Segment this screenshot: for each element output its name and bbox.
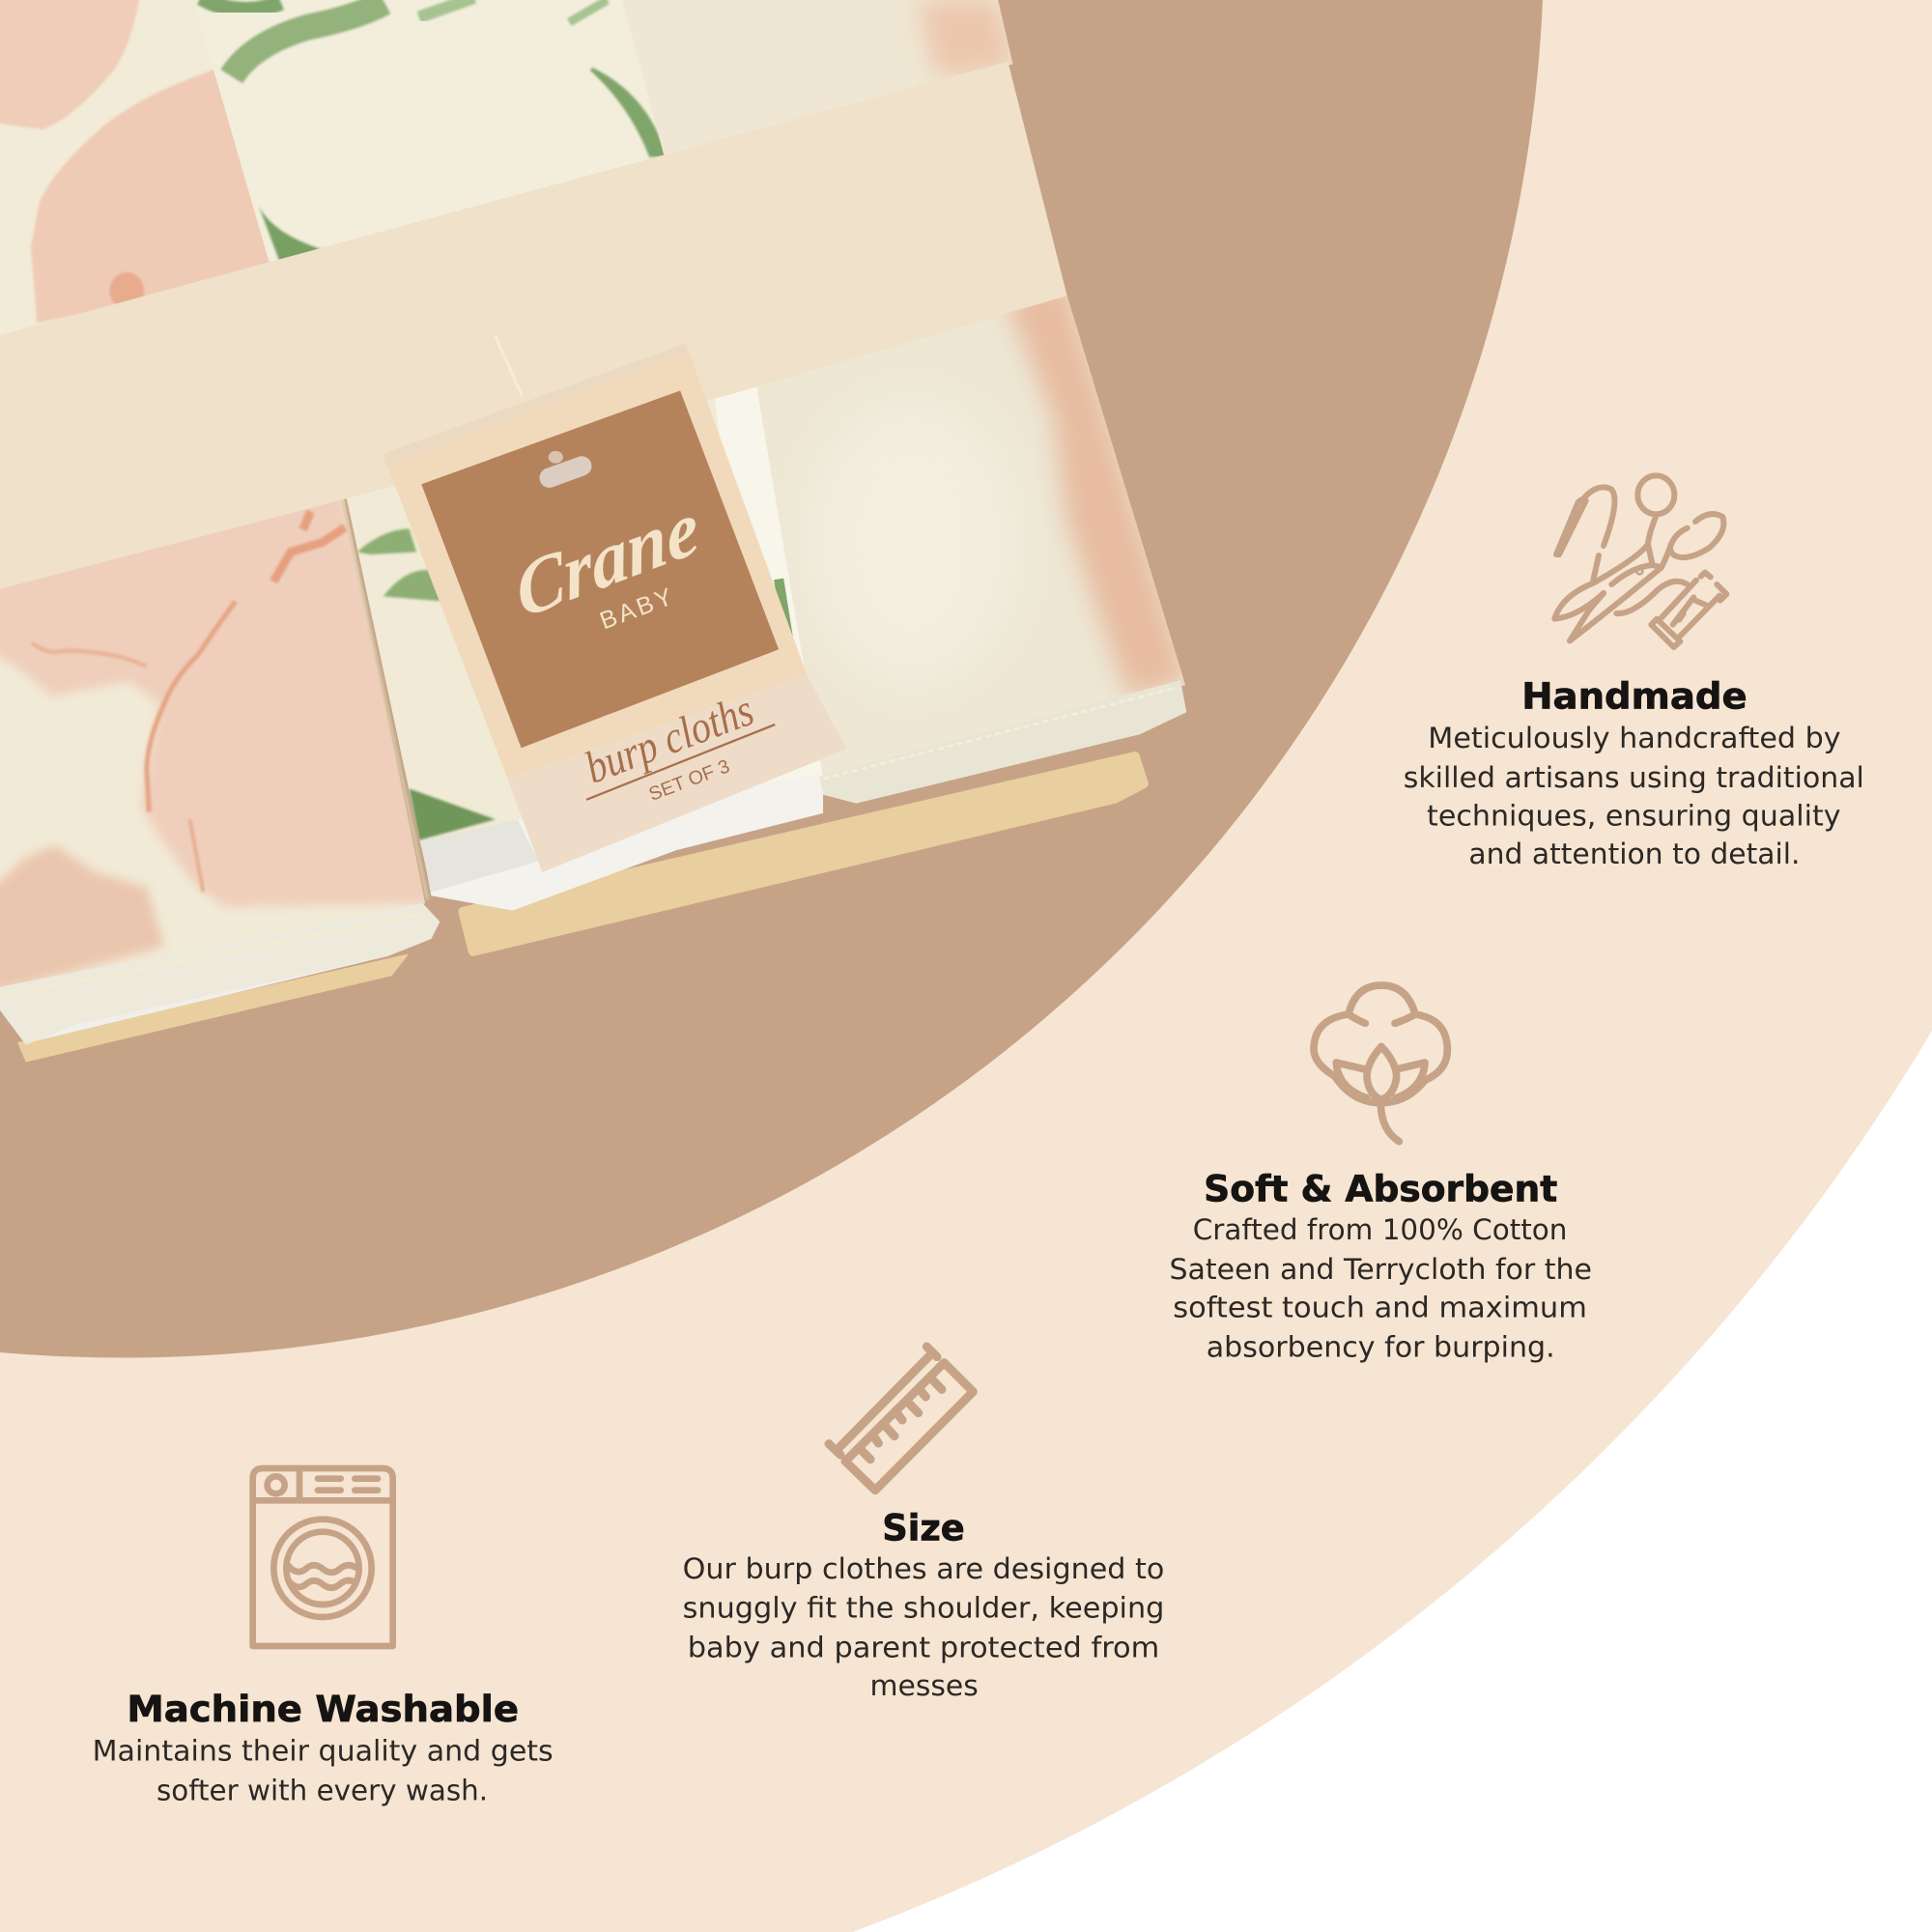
text: soft and absorbent description: Sateen and Terrycloth for the (1169, 1253, 1592, 1286)
icon: washing machine (253, 1468, 393, 1646)
tag lower label (508, 675, 846, 872)
heading: machine washable: Machine Washable (127, 1689, 519, 1730)
tag cream card (384, 345, 807, 779)
heading: handmade: Handmade (1521, 675, 1747, 717)
product name: burp cloths (579, 685, 760, 794)
icon: ruler (829, 1347, 973, 1491)
background: brown circle (0, 0, 1543, 1358)
heading: soft and absorbent: Soft & Absorbent (1204, 1169, 1557, 1210)
text: size description: baby and parent protected from (688, 1632, 1159, 1664)
icon: cotton boll (1314, 985, 1447, 1142)
cloth hems (0, 680, 1186, 1045)
heading: size: Size (882, 1507, 965, 1548)
upper right cloth (622, 0, 1012, 155)
label rule (586, 724, 775, 800)
canvas band (0, 62, 1067, 589)
lower right cloth (756, 291, 1185, 775)
text: soft and absorbent description: absorbency for burping. (1207, 1330, 1555, 1363)
text: handmade description: and attention to detail. (1468, 838, 1801, 870)
text: size description: messes (870, 1669, 979, 1702)
text: soft and absorbent description: Crafted from 100% Cotton (1193, 1213, 1567, 1246)
tag pin (537, 451, 594, 491)
text: handmade description: techniques, ensuring quality (1427, 800, 1841, 833)
text: handmade description: Meticulously handcrafted by (1428, 722, 1841, 754)
text: machine washable description (93, 1735, 554, 1807)
tan card behind left cloth (17, 953, 409, 1062)
tag brown square (421, 390, 779, 748)
text: size description (683, 1552, 1164, 1702)
upper left cloth (0, 0, 269, 335)
icon: needle, scissors and spool (1554, 475, 1726, 647)
text: machine washable description: Maintains their quality and gets (93, 1735, 554, 1768)
upper middle cloth (193, 0, 664, 263)
text: machine washable description: softer with every wash. (156, 1775, 488, 1807)
text: soft and absorbent description (1169, 1213, 1592, 1363)
text: handmade description: skilled artisans using traditional (1404, 761, 1864, 794)
set count: SET OF 3 (646, 755, 732, 806)
lower middle cloth (346, 386, 822, 848)
text: size description: snuggly fit the shoulder, keeping (683, 1592, 1164, 1625)
lower left cloth (0, 499, 425, 987)
product photo: burp cloth set (0, 0, 1195, 1062)
text: soft and absorbent description: softest touch and maximum (1173, 1292, 1587, 1324)
text: size description: Our burp clothes are designed to (683, 1552, 1164, 1585)
text: handmade description (1404, 722, 1864, 870)
cloth seam shadow (343, 499, 428, 899)
brand sub name: BABY (596, 582, 679, 635)
band loop (496, 336, 523, 397)
tan card behind right cloth (464, 756, 1144, 952)
hang tag (384, 344, 846, 872)
brand name: Crane (511, 483, 704, 636)
tag top strip (384, 344, 688, 466)
